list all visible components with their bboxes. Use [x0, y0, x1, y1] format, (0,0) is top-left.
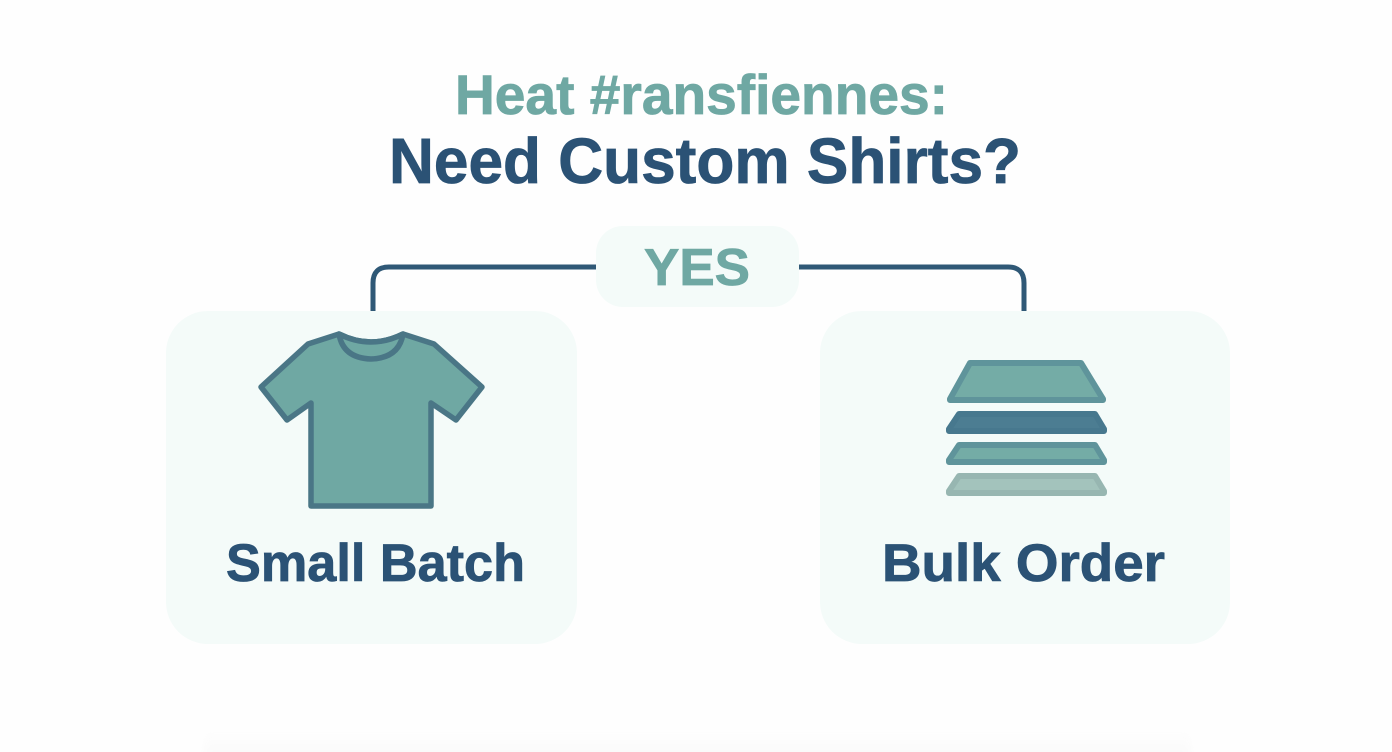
yes label: YES: [644, 239, 750, 297]
panel: small batch: [166, 311, 577, 644]
icon: t-shirt: [261, 334, 482, 506]
small batch label: Small Batch: [226, 534, 525, 593]
title: [389, 63, 1021, 197]
connector: left branch: [373, 267, 596, 311]
icon: stack of shirts: [949, 363, 1104, 493]
layer 1: [950, 363, 1103, 400]
yes badge: [596, 226, 799, 307]
layer 2: [949, 414, 1104, 431]
bulk order label: Bulk Order: [882, 534, 1165, 593]
layer 4: [949, 476, 1104, 493]
layer 3: [949, 445, 1104, 462]
title line 2: Need Custom Shirts?: [389, 125, 1021, 197]
title line 1: Heat #ransfiennes:: [455, 63, 948, 126]
connector: right branch: [799, 267, 1024, 311]
panel: bulk order: [820, 311, 1230, 644]
